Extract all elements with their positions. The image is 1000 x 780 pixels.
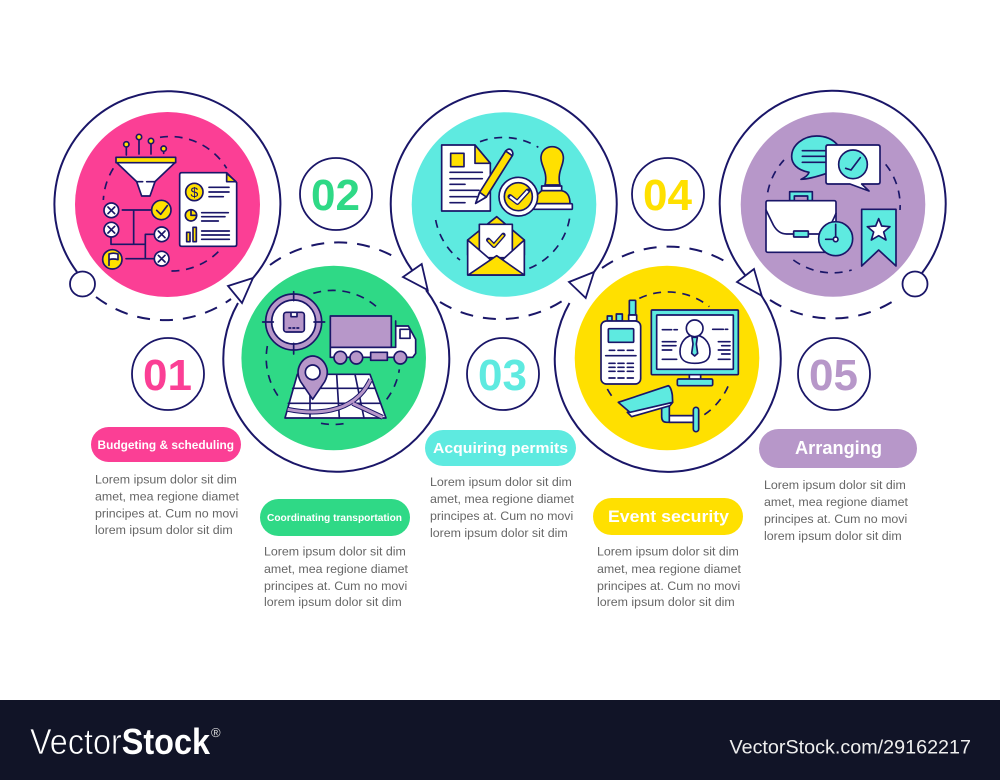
- arrow 4 to 5: [737, 269, 762, 296]
- yellow disc: [575, 266, 759, 450]
- icon: radio, monitor and camera: [601, 292, 738, 432]
- panel: step 3 acquiring permits: [391, 91, 617, 540]
- registered mark: ®: [211, 725, 221, 740]
- pill label 2: [260, 499, 410, 536]
- outline ring 4: [555, 295, 781, 472]
- number 02: [300, 158, 372, 230]
- arrow 1 to 2: [228, 278, 253, 303]
- pink disc: [75, 112, 260, 297]
- body text 2: Lorem ipsum dolor sit dim: [264, 544, 406, 558]
- body text 5: Lorem ipsum dolor sit dim: [764, 478, 906, 492]
- body text 5: [764, 478, 909, 543]
- body text 2: lorem ipsum dolor sit dim: [264, 595, 402, 609]
- outline ring 3: [391, 91, 617, 272]
- pill label 3: Acquiring permits: [433, 440, 568, 457]
- pill label 5: Arranging: [795, 438, 882, 458]
- number 03: [467, 338, 539, 410]
- outline ring 1: [54, 91, 280, 278]
- icon: funnel and budget document: [103, 134, 237, 271]
- number 05: 05: [809, 351, 858, 400]
- panel: step 1 budgeting and scheduling: [54, 91, 280, 537]
- body text 1: amet, mea regione diamet: [95, 490, 240, 504]
- pill label 3: [425, 430, 576, 466]
- pill label 4: [593, 498, 743, 535]
- pill label 2: Coordinating transportation: [267, 513, 402, 524]
- body text 5: amet, mea regione diamet: [764, 495, 909, 509]
- image id: VectorStock.com/29162217: [730, 737, 971, 758]
- body text 4: principes at. Cum no movi: [597, 579, 740, 593]
- body text 1: [95, 473, 240, 537]
- panel: step 4 event security: [555, 158, 781, 609]
- body text 3: [430, 475, 575, 540]
- dashed arc 2: [270, 242, 398, 265]
- body text 2: principes at. Cum no movi: [264, 579, 407, 593]
- dashed arc 5: [770, 298, 898, 318]
- body text 3: lorem ipsum dolor sit dim: [430, 526, 568, 540]
- panel: step 5 arranging: [720, 91, 946, 543]
- number 01: [132, 338, 204, 410]
- body text 4: [597, 544, 742, 609]
- body text 3: principes at. Cum no movi: [430, 509, 573, 523]
- number 04: [632, 158, 704, 230]
- cyan disc: [412, 112, 596, 297]
- end node: [902, 272, 928, 296]
- start node: [70, 272, 95, 296]
- outline ring 2: [223, 290, 449, 472]
- body text 1: Lorem ipsum dolor sit dim: [95, 473, 237, 487]
- dashed arc 1: [96, 297, 231, 320]
- body text 2: amet, mea regione diamet: [264, 562, 409, 576]
- body text 5: lorem ipsum dolor sit dim: [764, 529, 902, 543]
- body text 1: principes at. Cum no movi: [95, 506, 238, 520]
- icon: document, stamp and envelope: [436, 137, 572, 275]
- pill label 1: [91, 427, 241, 462]
- body text 3: Lorem ipsum dolor sit dim: [430, 475, 572, 489]
- body text 3: amet, mea regione diamet: [430, 492, 575, 506]
- icon: chat, briefcase and bookmark: [766, 136, 900, 273]
- number 01: 01: [143, 351, 192, 400]
- arrow 2 to 3: [403, 264, 428, 290]
- footer bar: [0, 700, 1000, 780]
- body text 4: Lorem ipsum dolor sit dim: [597, 544, 739, 558]
- icon: funnel and budget document: $: [190, 184, 198, 200]
- body text 4: amet, mea regione diamet: [597, 562, 742, 576]
- dashed arc 3: [440, 297, 568, 319]
- number 04: 04: [643, 171, 692, 220]
- dashed arc 4: [602, 247, 728, 268]
- body text 1: lorem ipsum dolor sit dim: [95, 523, 233, 537]
- number 03: 03: [478, 351, 527, 400]
- body text 4: lorem ipsum dolor sit dim: [597, 595, 735, 609]
- purple disc: [741, 112, 925, 297]
- pill label 5: [759, 429, 917, 468]
- watermark logo: VectorStock: [30, 721, 211, 762]
- green disc: [241, 266, 426, 450]
- arrow 3 to 4: [569, 272, 594, 298]
- pill label 4: Event security: [608, 507, 730, 526]
- number 05: [798, 338, 870, 410]
- panel: step 2 coordinating transportation: [223, 158, 449, 609]
- number 02: 02: [311, 171, 360, 220]
- pill label 1: Budgeting & scheduling: [98, 438, 234, 452]
- body text 2: [264, 544, 409, 609]
- body text 5: principes at. Cum no movi: [764, 512, 907, 526]
- outline ring 5: [720, 91, 946, 275]
- icon: target, truck and map: [263, 290, 416, 424]
